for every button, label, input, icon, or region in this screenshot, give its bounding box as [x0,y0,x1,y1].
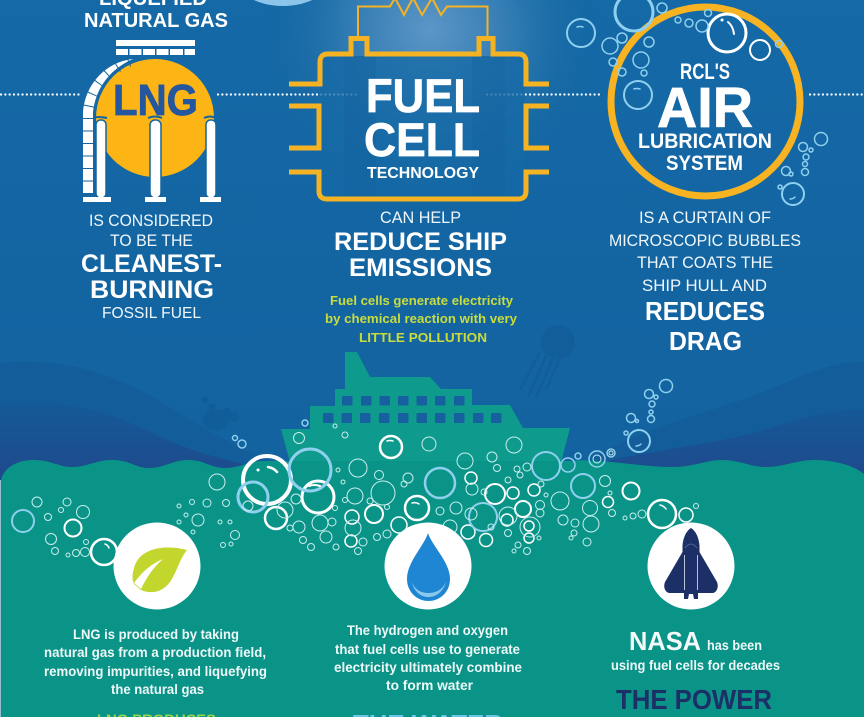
bubbles: small teal [32,424,698,557]
icon: leaf [114,522,200,610]
text: reduce ship emissions: CAN HELP [380,208,461,227]
heading: liquefied natural gas: NATURAL GAS [84,9,228,32]
text: water: electricity ultimately combine [334,660,522,675]
dotted divider line [1,93,864,96]
text: cleanest-burning: CLEANEST- [81,250,222,278]
heading: RCL's air lubrication system: RCL'S [680,59,730,84]
text: water: to form water [386,678,474,693]
teal sea with waves [1,460,864,717]
text: reduce ship emissions: REDUCE SHIP [334,228,507,256]
ship windows [323,396,502,423]
icon: space shuttle [648,522,734,610]
text: cleanest-burning: IS CONSIDERED [89,211,213,230]
panel: LNG production [44,522,267,717]
top bubble fragment [233,0,333,6]
panel: water [334,522,522,717]
text: reduce ship emissions [334,208,507,282]
text: fuel cell note [325,293,518,345]
text: LNG production: removing impurities, and liquefying [44,664,267,679]
icon: LNG storage tank [83,40,221,202]
text: curtain of bubbles: IS A CURTAIN OF [639,208,771,227]
bubbles: white large [64,14,770,565]
left edge strip [0,480,1,717]
heading: fuel cell technology: TECHNOLOGY [367,165,479,182]
text: cleanest-burning: BURNING [90,276,214,304]
panel: fuel cell [289,0,549,345]
text: cleanest-burning: TO BE THE [110,231,193,250]
text: LNG production: LNG is produced by taking [73,627,239,642]
text: reduce ship emissions: EMISSIONS [349,254,492,282]
panel: NASA [611,522,780,715]
text: NASA [611,626,780,715]
text: curtain of bubbles: DRAG [669,326,742,356]
panel: air lubrication [609,7,801,356]
text: curtain of bubbles: REDUCES [645,296,765,326]
heading: RCL's air lubrication system [638,59,772,175]
text: curtain of bubbles: THAT COATS THE [637,253,773,272]
text: water [334,623,522,717]
text: water: The hydrogen and oxygen [347,623,508,638]
icon: yellow ring [611,7,800,196]
heading: fuel cell technology: CELL [364,113,480,166]
text: curtain of bubbles [609,208,801,356]
icon: jellyfish silhouette [520,325,575,398]
icon: LNG storage tank: LNG [113,76,198,125]
bubbles: light blue [12,0,828,532]
heading: fuel cell technology [364,69,480,182]
icon: sea creature silhouette [202,396,239,431]
text: cleanest-burning [81,211,222,322]
text: water: that fuel cells use to generate [335,642,520,657]
text: fuel cell note: LITTLE POLLUTION [359,330,487,345]
icon: fuel cell circuit [289,0,549,199]
text: NASA: THE POWER [616,684,772,715]
heading: fuel cell technology: FUEL [366,69,480,122]
text: NASA: has been [707,638,762,653]
text: LNG production: natural gas from a production field, [44,645,266,660]
text: NASA: using fuel cells for decades [611,658,780,673]
text: fuel cell note: Fuel cells generate electricity [330,293,514,308]
text: LNG production: the natural gas [111,682,204,697]
heading: RCL's air lubrication system: LUBRICATION [638,130,772,153]
heading: RCL's air lubrication system: SYSTEM [666,152,743,175]
bubble highlights [105,20,795,548]
text: cleanest-burning: FOSSIL FUEL [102,305,201,322]
text: curtain of bubbles: MICROSCOPIC BUBBLES [609,231,801,250]
icon: water drop [384,522,472,610]
text: curtain of bubbles: SHIP HULL AND [642,276,767,295]
text: fuel cell note: by chemical reaction with very [325,311,518,326]
text: NASA: NASA [629,626,701,656]
heading: RCL's air lubrication system: AIR [657,76,753,140]
panel: LNG [81,0,228,322]
ship [281,352,570,470]
text: LNG production [44,627,267,717]
